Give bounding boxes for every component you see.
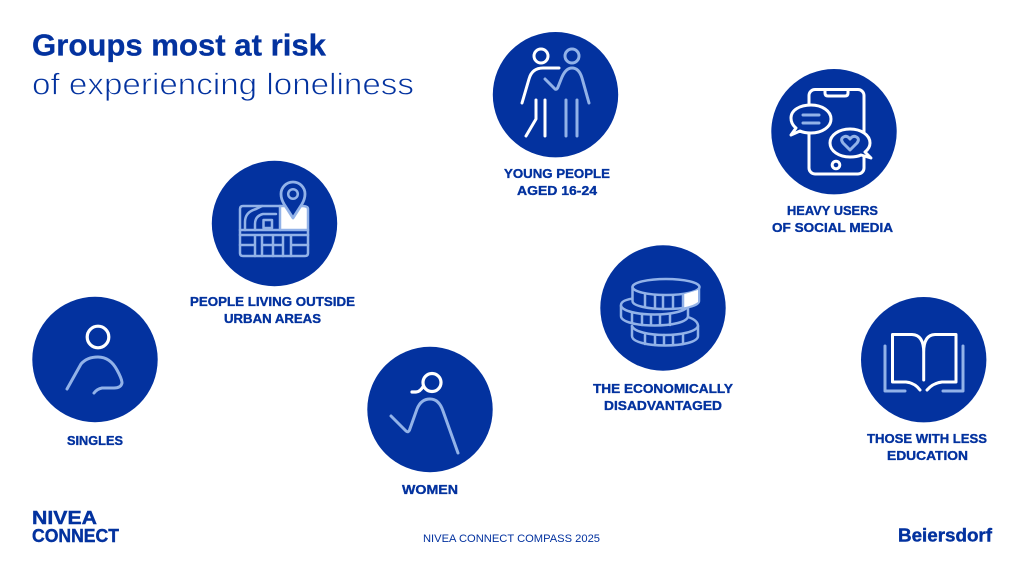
footer source: NIVEA CONNECT COMPASS 2025: [423, 533, 600, 545]
label: young people aged 16-24: AGED 16-24: [517, 183, 598, 198]
panel: people living outside urban areas: [190, 161, 355, 326]
icon: single person: [67, 326, 122, 393]
icon: smartphone with chat bubbles: [791, 90, 871, 174]
title: of experiencing loneliness: [32, 66, 414, 102]
title: [32, 28, 414, 102]
label: people living outside urban areas: PEOPLE LIVING OUTSIDE: [190, 294, 355, 309]
panel: singles: [32, 297, 158, 448]
label: those with less education: EDUCATION: [887, 448, 968, 463]
logo: nivea connect: [32, 507, 120, 546]
logo: nivea connect: NIVEA: [32, 507, 97, 528]
label: heavy users of social media: [772, 203, 894, 235]
label: young people aged 16-24: [504, 166, 610, 198]
label: the economically disadvantaged: DISADVANTAGED: [604, 398, 722, 413]
label: young people aged 16-24: YOUNG PEOPLE: [504, 166, 610, 181]
panel: the economically disadvantaged: [593, 245, 733, 413]
label: people living outside urban areas: URBAN AREAS: [224, 311, 321, 326]
title: Groups most at risk: [32, 28, 327, 62]
panel: women: [367, 347, 493, 497]
label: heavy users of social media: HEAVY USERS: [787, 203, 878, 218]
label: those with less education: THOSE WITH LESS: [867, 431, 987, 446]
logo: nivea connect: CONNECT: [32, 525, 120, 546]
label: people living outside urban areas: [190, 294, 355, 326]
icon: two young people: [522, 49, 589, 136]
label: heavy users of social media: OF SOCIAL MEDIA: [772, 220, 894, 235]
logo: beiersdorf: Beiersdorf: [898, 524, 993, 546]
label: those with less education: [867, 431, 987, 463]
panel: heavy users of social media: [771, 69, 897, 235]
icon: coin stack: [621, 279, 700, 346]
icon: open book: [885, 334, 963, 391]
label: singles: SINGLES: [67, 433, 123, 448]
label: the economically disadvantaged: THE ECONOMICALLY: [593, 381, 733, 396]
panel: those with less education: [861, 297, 987, 463]
label: women: WOMEN: [402, 482, 458, 497]
panel: young people aged 16-24: [493, 32, 618, 198]
icon: map with pin: [240, 182, 308, 256]
label: the economically disadvantaged: [593, 381, 733, 413]
icon: woman: [391, 374, 458, 453]
